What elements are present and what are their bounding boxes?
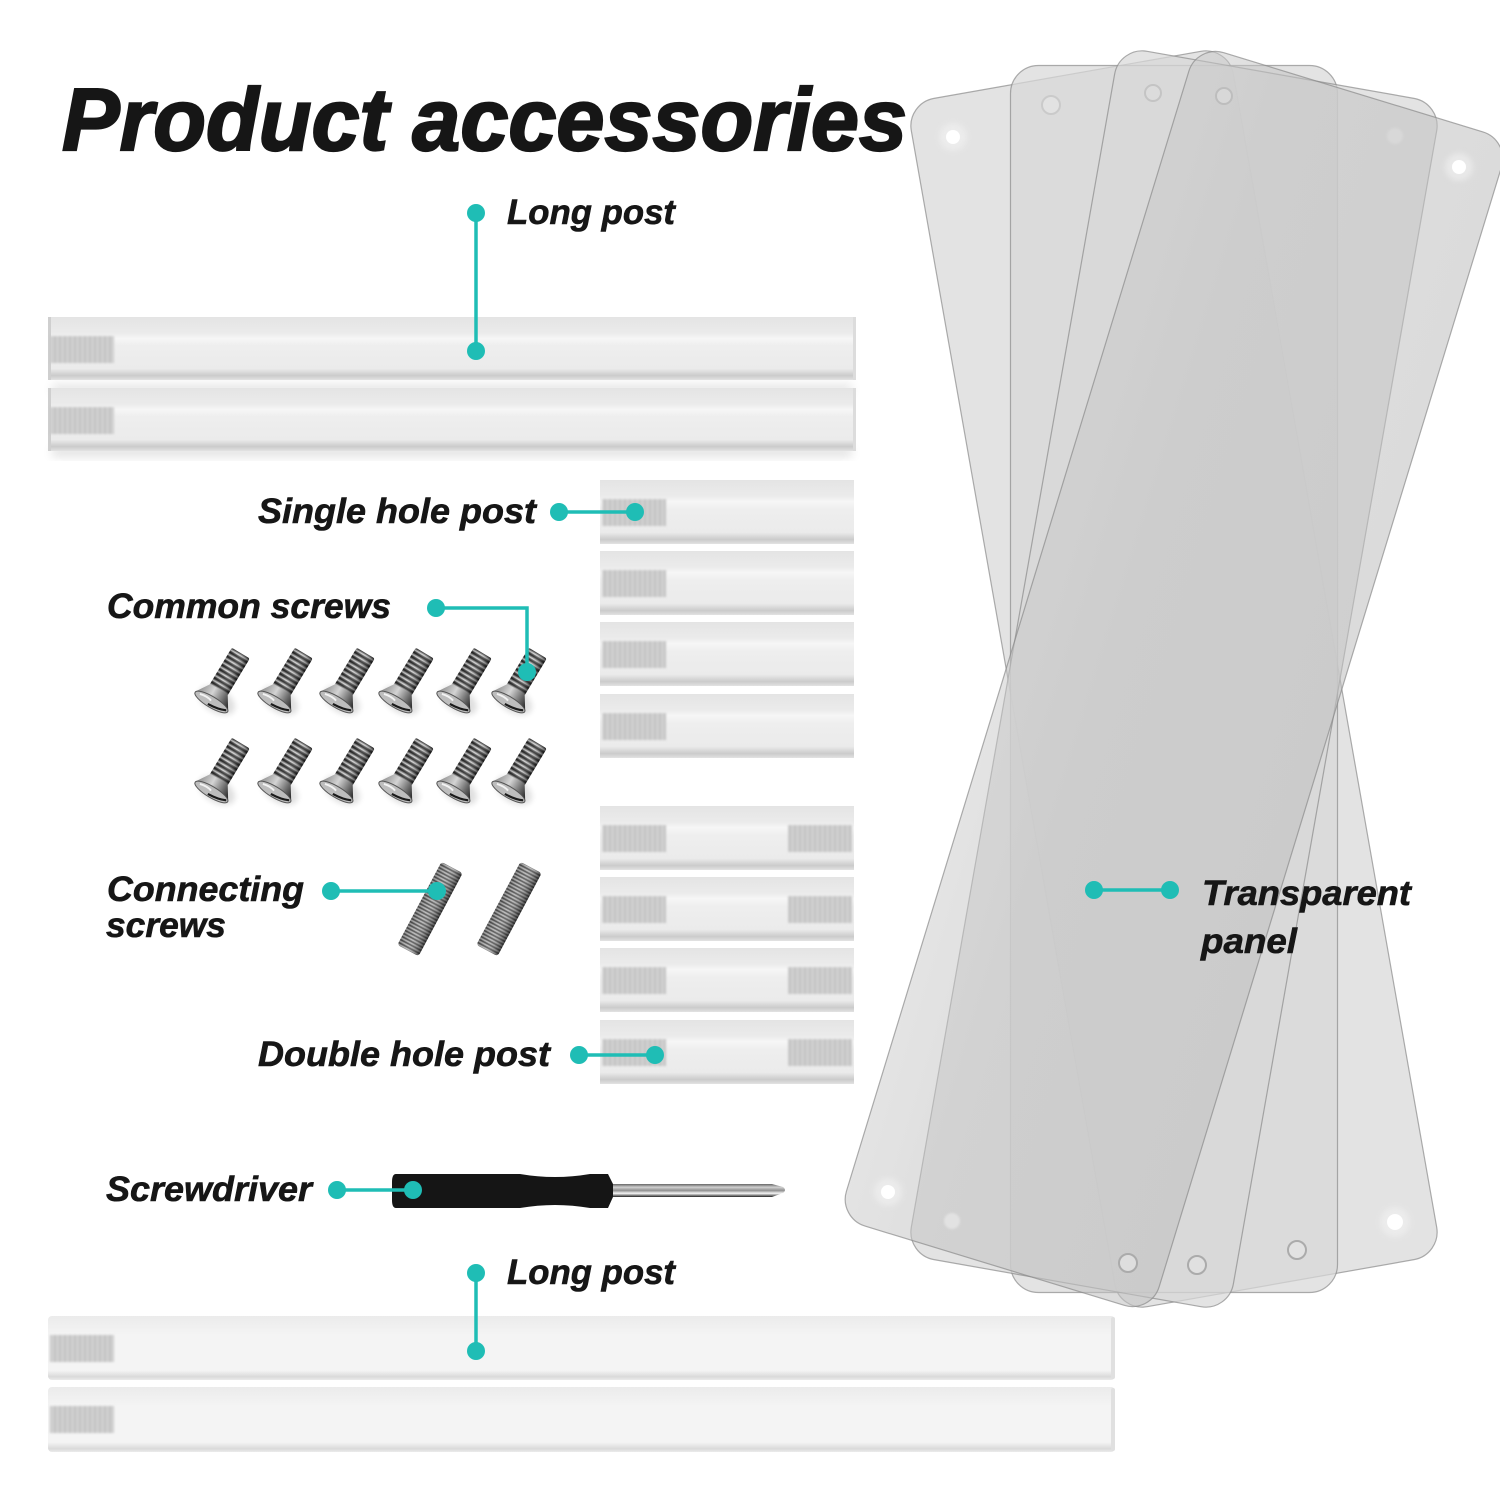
panel: upright bbox=[1010, 66, 1338, 1292]
single hole posts bbox=[600, 480, 854, 758]
transparent panels stack bbox=[838, 45, 1500, 1313]
label: transparent panel: panel bbox=[1200, 922, 1298, 961]
label: screwdriver: Screwdriver bbox=[106, 1170, 314, 1209]
common screws bbox=[191, 643, 558, 811]
long posts top bbox=[48, 317, 856, 456]
label: connecting screws: screws bbox=[106, 906, 226, 945]
label: common screws: Common screws bbox=[107, 587, 391, 626]
double hole posts bbox=[600, 806, 854, 1084]
panel holes bbox=[874, 85, 1473, 1274]
label: transparent panel bbox=[1085, 874, 1412, 961]
label: connecting screws: Connecting bbox=[107, 870, 304, 909]
panel: rotated back left bbox=[906, 46, 1442, 1312]
connecting screws bbox=[397, 862, 542, 956]
screwdriver bbox=[392, 1174, 785, 1208]
label: long post bottom bbox=[467, 1253, 676, 1360]
panel: rotated right bbox=[906, 46, 1442, 1312]
label: screwdriver bbox=[106, 1170, 422, 1209]
label: long post top: Long post bbox=[507, 193, 676, 232]
title: Product accessories bbox=[62, 70, 907, 169]
label: transparent panel: Transparent bbox=[1202, 874, 1412, 913]
label: single hole post: Single hole post bbox=[258, 492, 537, 531]
label: common screws bbox=[107, 587, 536, 681]
label: connecting screws bbox=[106, 870, 446, 945]
label: double hole post: Double hole post bbox=[258, 1035, 551, 1074]
label: long post bottom: Long post bbox=[507, 1253, 676, 1292]
label: long post top bbox=[467, 193, 676, 360]
panel: front bbox=[838, 45, 1500, 1313]
label: double hole post bbox=[258, 1035, 664, 1074]
long posts bottom bbox=[48, 1316, 1115, 1452]
